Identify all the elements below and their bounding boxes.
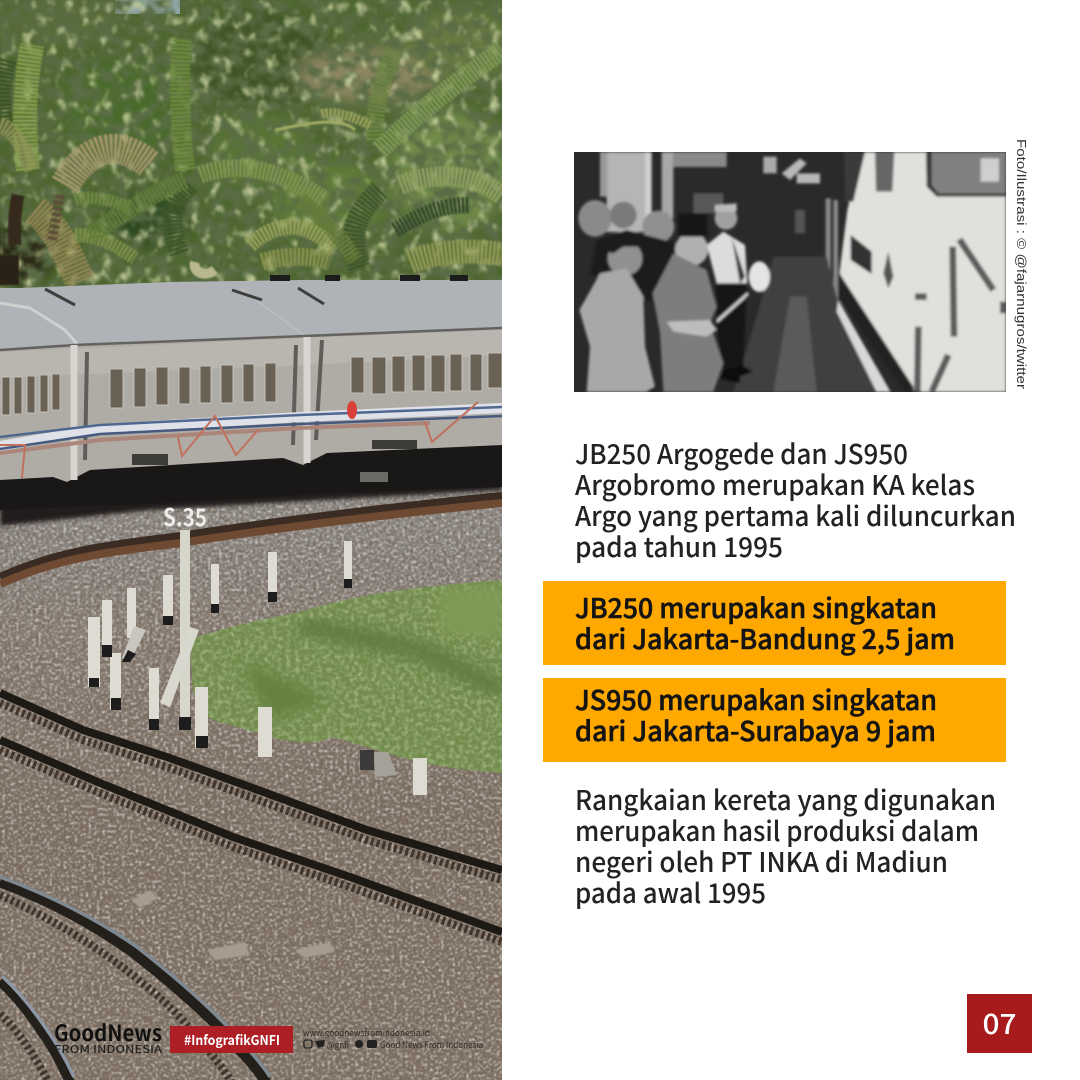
text block: second paragraph: negeri oleh PT INKA di Madiun bbox=[575, 841, 948, 880]
undercarriage bbox=[0, 443, 502, 510]
social media links: @gnfi bbox=[327, 1039, 349, 1051]
man at left bbox=[579, 240, 655, 392]
garlands bbox=[915, 239, 1003, 392]
social media links: Good News From Indonesia bbox=[380, 1039, 483, 1051]
kilometre sign S.35 bbox=[163, 498, 207, 730]
track behind train bbox=[0, 496, 502, 584]
grass patch bbox=[190, 580, 502, 773]
social icons bbox=[304, 1040, 377, 1048]
trackside posts bbox=[88, 541, 427, 795]
callout: JS950: JS950 merupakan singkatan bbox=[575, 679, 937, 718]
carriage bodies bbox=[0, 328, 502, 482]
logo: GoodNews from Indonesia: FROM INDONESIA bbox=[54, 1042, 163, 1057]
carriage gaps bbox=[74, 337, 307, 480]
officials bbox=[579, 202, 770, 392]
platform floor bbox=[733, 257, 888, 392]
main curved tracks bbox=[0, 693, 502, 1080]
rail ties bbox=[0, 703, 502, 1080]
callout: JS950: dari Jakarta-Surabaya 9 jam bbox=[575, 710, 936, 749]
roof bbox=[0, 280, 502, 350]
logo: GoodNews from Indonesia: GoodNews bbox=[54, 1016, 162, 1048]
text block: second paragraph: merupakan hasil produksi dalam bbox=[575, 810, 979, 849]
hashtag tag: #InfografikGNFI bbox=[184, 1029, 280, 1049]
text block: first paragraph: pada tahun 1995 bbox=[575, 526, 783, 565]
hashtag tag bbox=[170, 1026, 293, 1053]
palm trunks bbox=[14, 195, 18, 245]
callout: JB250: dari Jakarta-Bandung 2,5 jam bbox=[575, 618, 955, 657]
page number badge: 07 bbox=[982, 1003, 1016, 1043]
text block: first paragraph: Argo yang pertama kali diluncurkan bbox=[575, 495, 1016, 534]
text block: second paragraph: pada awal 1995 bbox=[575, 872, 766, 911]
kilometre sign S.35: S.35 bbox=[163, 498, 207, 533]
windows bbox=[2, 353, 502, 415]
palm fronds bbox=[0, 38, 502, 285]
train bbox=[0, 278, 502, 526]
callout: JB250 bbox=[543, 581, 1006, 665]
page number badge bbox=[967, 994, 1032, 1053]
station background bbox=[578, 152, 838, 312]
ceremonial paddle bbox=[717, 261, 770, 322]
train shadow bbox=[0, 478, 502, 526]
text block: first paragraph: Argobromo merupakan KA kelas bbox=[575, 464, 975, 503]
social media links: www.goodnewsfromindonesia.id bbox=[303, 1026, 430, 1039]
underframe box bbox=[132, 440, 417, 465]
historic photo: train launch bbox=[574, 152, 1006, 392]
ground and gravel bbox=[0, 480, 502, 1080]
social media links bbox=[303, 1026, 483, 1051]
official in white shirt bbox=[707, 203, 753, 383]
panel: railway photo bbox=[0, 0, 502, 1080]
photo credit: Foto/Ilustrasi : © @fajarnugros/twitter bbox=[1014, 139, 1028, 389]
central figure with cap bbox=[653, 213, 723, 392]
text block: second paragraph bbox=[575, 782, 996, 911]
carriage bbox=[837, 152, 1006, 392]
callout: JB250: JB250 merupakan singkatan bbox=[575, 587, 937, 626]
trees bbox=[0, 0, 515, 300]
callout: JS950 bbox=[543, 678, 1006, 762]
livery stripes bbox=[0, 402, 502, 478]
stones bbox=[132, 890, 335, 960]
text block: first paragraph bbox=[575, 436, 1016, 565]
red lamp bbox=[347, 401, 357, 419]
